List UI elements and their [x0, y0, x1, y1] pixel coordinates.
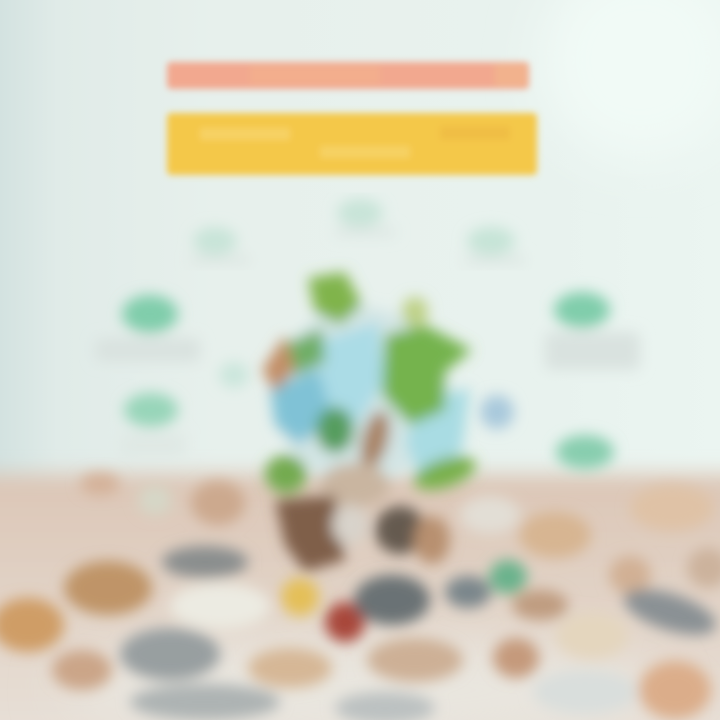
top labels	[190, 199, 525, 264]
pebbles and stones	[0, 473, 720, 720]
subtitle: yellow banner	[167, 113, 537, 175]
left callouts	[95, 295, 249, 456]
title: salmon banner	[167, 62, 529, 89]
table surface	[0, 474, 720, 720]
right callouts	[480, 292, 640, 469]
plant and globe	[262, 272, 480, 572]
